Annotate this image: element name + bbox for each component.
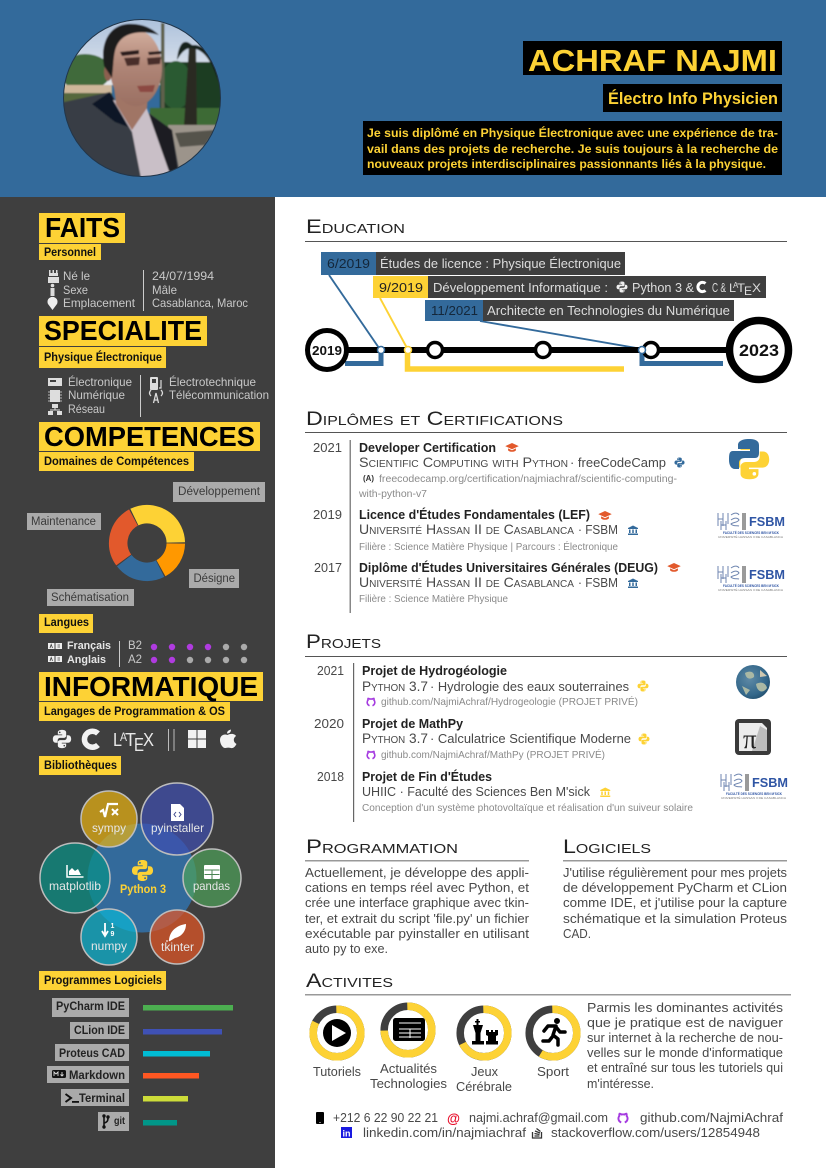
specialities list: Électrotechnique	[169, 374, 256, 389]
row: Markdown	[47, 1066, 199, 1083]
entry: Licence: 2019	[313, 507, 342, 522]
personal facts	[48, 269, 248, 311]
icon: linkedin: in	[342, 1128, 350, 1138]
text block: logiciels: J'utilise régulièrement pour mes projets	[563, 865, 787, 880]
icon: LaTeX: X	[143, 730, 154, 750]
entry: Developer Certification: Scientific Computing with Python	[359, 454, 568, 470]
text block: logiciels: schématique et la simulation Proteus	[563, 911, 788, 926]
row: Proteus: Proteus CAD	[59, 1048, 125, 1060]
text block: logiciels: CAD.	[563, 926, 591, 941]
timeline	[308, 252, 788, 380]
bar chart: software	[47, 998, 233, 1131]
icon: birthday cake	[48, 270, 59, 283]
milestone: 2023	[730, 320, 788, 380]
tag: Physique Electronique: Physique Électronique	[44, 351, 162, 364]
row: git: git	[114, 1115, 125, 1127]
facts labels: Né le	[63, 269, 90, 283]
contact details	[316, 1110, 783, 1140]
specialities list: Électronique	[68, 374, 132, 389]
name: ACHRAF NAJMI	[528, 43, 777, 78]
milestone: 2023: 2023	[739, 341, 779, 360]
tag: Bibliotheques	[39, 756, 121, 775]
bubble: sympy: sympy	[92, 821, 126, 835]
projects list	[314, 663, 788, 822]
row: Terminal	[61, 1089, 188, 1106]
summary: vail dans des projets de recherche. Je suis toujours à la recherche de	[367, 142, 778, 156]
job title	[603, 84, 782, 112]
text block: activites: velles sur le monde d'informatique	[587, 1045, 783, 1060]
milestone: 2019: 2019	[312, 343, 342, 358]
event: 6/2019	[321, 252, 625, 275]
icon: phone	[316, 1112, 324, 1124]
text block: programmation: crée une interface graphique avec tkin-	[305, 895, 529, 910]
specialities list: Numérique	[68, 388, 125, 402]
heading: COMPETENCES: COMPETENCES	[44, 421, 255, 452]
event: 11/2021: Architecte en Technologies du Numérique	[487, 304, 730, 318]
connector lines	[329, 275, 642, 349]
languages: B2	[128, 638, 142, 652]
entry: Developer Certification: with-python-v7	[358, 488, 427, 500]
contact details: linkedin.com/in/najmiachraf	[363, 1125, 526, 1140]
label: Schematisation	[47, 589, 134, 606]
text block: programmation: ter, et extrait du script 'file.py' un fichier	[305, 911, 530, 926]
diplomas list	[313, 439, 785, 613]
heading: SPECIALITE: SPECIALITE	[44, 315, 202, 346]
languages: Français	[67, 640, 111, 652]
specialities list: Télécommunication	[169, 388, 269, 402]
bubble diagram: python libraries	[40, 783, 241, 965]
facts labels: Emplacement	[63, 296, 136, 310]
bubble: sympy	[81, 791, 137, 847]
icon: LaTeX	[113, 730, 154, 755]
facts values: 24/07/1994	[152, 269, 214, 283]
icon: LaTeX: T	[125, 730, 136, 750]
text block: activites: m'intéresse.	[587, 1076, 654, 1091]
event: 11/2021	[425, 300, 734, 321]
label: Designe: Désigne	[194, 573, 235, 585]
entry: Licence	[313, 507, 638, 553]
level dots: English	[151, 657, 247, 663]
central bubble: Python 3	[88, 824, 196, 932]
entry: Projet de Fin d'Etudes: Conception d'un système photovoltaïque et réalisation d'un suiveur solaire	[362, 802, 693, 814]
label: Maintenance	[27, 513, 101, 530]
facts labels	[63, 269, 136, 310]
logo: FSBM	[718, 513, 785, 539]
row: git	[98, 1112, 177, 1131]
icon: stack overflow	[532, 1128, 542, 1138]
entry: Licence: · FSBM	[578, 522, 618, 537]
event: 9/2019: T	[737, 281, 746, 295]
tag: Langues: Langues	[44, 617, 89, 629]
header band	[0, 0, 826, 197]
language and OS icons	[53, 729, 237, 755]
icon: github	[618, 1114, 628, 1122]
contact details: stackoverflow.com/users/12854948	[551, 1125, 760, 1140]
entry: DEUG: Université Hassan II de Casablanca	[359, 574, 574, 590]
row: Markdown: Markdown	[69, 1070, 125, 1082]
row: CLion	[70, 1022, 222, 1039]
entry: DEUG: · FSBM	[578, 575, 618, 590]
bubble: numpy: 9	[110, 931, 114, 938]
bubble: tkinter	[150, 910, 204, 964]
tag: Programmes Logiciels: Programmes Logiciels	[44, 975, 162, 987]
entry: Developer Certification: 2021	[313, 440, 342, 455]
logo: python	[729, 439, 769, 479]
entry: Developer Certification: · freeCodeCamp	[570, 455, 666, 470]
entry: Projet de Fin d'Etudes: 2018	[317, 769, 344, 784]
milestone: 2019	[308, 330, 346, 370]
text block: activites: que je pratique est de naviguer	[587, 1015, 784, 1030]
entry: MathPy: 2020	[314, 716, 344, 731]
logo: FSBM	[718, 566, 785, 592]
specialities list	[48, 374, 269, 417]
bubble: tkinter: tkinter	[161, 940, 194, 954]
icon: person	[50, 284, 54, 296]
facts labels: Sexe	[63, 283, 88, 297]
event: 11/2021: 11/2021	[431, 304, 478, 318]
activity: Jeux Cerebrale: Cérébrale	[456, 1079, 512, 1094]
icon: network	[48, 404, 62, 415]
entry: Projet de Fin d'Etudes	[317, 769, 693, 814]
activity: Actualites Technologies: Actualités	[380, 1061, 437, 1076]
label: Schematisation: Schématisation	[51, 592, 129, 604]
icon: chip	[48, 390, 62, 402]
entry: MathPy: Projet de MathPy	[362, 717, 463, 731]
event: 9/2019: 9/2019	[379, 281, 423, 295]
text block: activites: Parmis les dominantes activités	[587, 1000, 784, 1015]
summary: Je suis diplômé en Physique Électronique avec une expérience de tra-	[367, 125, 778, 140]
icon: at sign: @	[447, 1110, 460, 1126]
icon: pi calculator: π	[743, 724, 757, 754]
facts values: Casablanca, Maroc	[152, 296, 248, 310]
activity: Sport: Sport	[537, 1064, 569, 1079]
icon: antenna	[150, 390, 162, 403]
bubble: pyinstaller: pyinstaller	[151, 821, 204, 835]
tag: Physique Electronique	[39, 347, 166, 368]
text block: programmation: exécutable par pyinstaller en utilisant	[305, 926, 529, 941]
tag: Langues	[39, 614, 93, 633]
entry: Projet de Fin d'Etudes: UHIIC · Faculté des Sciences Ben M'sick	[362, 784, 590, 799]
icon: charging station	[150, 377, 161, 390]
icon: translate	[48, 643, 62, 662]
contact details: github.com/NajmiAchraf	[640, 1110, 783, 1125]
entry: MathPy	[314, 716, 650, 761]
text block: activites	[587, 1000, 784, 1091]
text block: programmation: cations en temps réel avec Python, et	[305, 880, 529, 895]
text block: logiciels: comme IDE, et j'utilise pour la capture	[563, 895, 787, 910]
entry: Licence: Licence d'Études Fondamentales (LEF)	[359, 507, 590, 522]
entry: MathPy: · Calculatrice Scientifique Moderne	[430, 731, 631, 746]
event: 9/2019: C &	[712, 281, 726, 295]
event: 9/2019: E	[744, 284, 752, 298]
row: PyCharm: PyCharm IDE	[56, 1001, 125, 1013]
contact details: najmi.achraf@gmail.com	[469, 1110, 608, 1125]
bubble: matplotlib	[40, 843, 110, 913]
heading: INFORMATIQUE: INFORMATIQUE	[44, 671, 258, 702]
label: Developpement	[173, 482, 265, 502]
text block: programmation: Actuellement, je développe des appli-	[305, 865, 529, 880]
row: Proteus	[55, 1044, 210, 1061]
icon: pi calculator	[735, 719, 771, 755]
bubble: pyinstaller	[141, 783, 213, 855]
tag: Langages: Langages de Programmation & OS	[44, 706, 225, 718]
activity: Tutoriels	[313, 1009, 361, 1079]
event: 6/2019: 6/2019	[327, 257, 370, 271]
level dots: French	[151, 644, 247, 650]
summary	[363, 121, 782, 175]
portrait photo	[64, 20, 220, 176]
entry: Projet de Fin d'Etudes: Projet de Fin d'Études	[362, 769, 492, 784]
entry: Hydrogeologie: 2021	[317, 663, 344, 678]
tag: Langages	[39, 702, 230, 721]
central bubble: Python 3: Python 3	[120, 882, 166, 896]
tag: Personnel: Personnel	[44, 247, 96, 259]
activity: Actualites Technologies	[370, 1006, 448, 1091]
entry: Hydrogeologie: github.com/NajmiAchraf/Hydrogeologie (PROJET PRIVÉ)	[381, 695, 638, 708]
icon: windows	[188, 730, 206, 748]
event: 9/2019: X	[752, 281, 761, 295]
event: 9/2019: L	[729, 281, 736, 295]
contact details: +212 6 22 90 22 21	[333, 1110, 438, 1125]
entry: Developer Certification	[313, 440, 685, 500]
entry: DEUG	[314, 560, 681, 605]
event: 9/2019: Développement Informatique :	[433, 281, 608, 295]
tag: Programmes Logiciels	[39, 971, 166, 990]
bubble: matplotlib: matplotlib	[49, 879, 101, 893]
activity: Actualites Technologies: Technologies	[370, 1076, 448, 1091]
event: 9/2019	[373, 276, 766, 298]
section heading: Logiciels: Logiciels	[563, 837, 651, 858]
heading: FAITS: FAITS	[45, 212, 120, 243]
label: Designe	[189, 569, 239, 588]
row: CLion: CLion IDE	[74, 1025, 125, 1037]
bubble: numpy: numpy	[91, 939, 127, 953]
donut chart: skills	[107, 503, 187, 583]
specialities list: Réseau	[68, 402, 105, 416]
job title: Électro Info Physicien	[608, 89, 778, 108]
text block: activites: et entraîné sur tous les tutoriels qui	[587, 1060, 783, 1075]
entry: MathPy: github.com/NajmiAchraf/MathPy (PROJET PRIVÉ)	[381, 748, 605, 761]
icon: LaTeX: L	[113, 730, 122, 750]
tag: Personnel	[39, 244, 101, 260]
icon: chess pieces	[472, 1019, 498, 1044]
logo: FSBM	[721, 774, 788, 800]
entry: DEUG: 2017	[314, 560, 342, 575]
text block: logiciels: de développement PyCharm et CLion	[563, 880, 787, 895]
section heading: Programmation: Programmation	[306, 837, 458, 858]
text block: logiciels	[563, 865, 788, 941]
tag: Domaines de Competences	[39, 452, 194, 471]
icon: location pin	[48, 297, 58, 310]
entry: Developer Certification: freecodecamp.org/certification/najmiachraf/scientific-computing-	[379, 473, 677, 485]
entry: Licence: Filière : Science Matière Physique | Parcours : Électronique	[359, 540, 618, 553]
tag: Bibliotheques: Bibliothèques	[44, 760, 117, 772]
bubble: pandas	[183, 849, 241, 907]
icon: LaTeX: E	[134, 735, 144, 755]
section heading: Activites: Activites	[306, 971, 393, 992]
activity: Jeux Cerebrale	[456, 1009, 512, 1094]
section heading: Education: Education	[306, 217, 405, 238]
label: Maintenance: Maintenance	[31, 516, 96, 528]
image: earth	[736, 665, 770, 699]
tag: Domaines de Competences: Domaines de Compétences	[44, 456, 189, 468]
summary: nouveaux projets interdisciplinaires passionnants liés à la physique.	[367, 157, 766, 171]
row: PyCharm	[52, 998, 233, 1017]
text block: activites: sur internet à la recherche de nou-	[587, 1030, 783, 1045]
event: 9/2019: A	[733, 281, 739, 290]
entry: Developer Certification: Developer Certification	[359, 441, 496, 455]
icon: LaTeX: A	[120, 730, 127, 744]
icon: C	[84, 731, 98, 747]
text block: programmation	[305, 865, 530, 956]
activity: Jeux Cerebrale: Jeux	[471, 1064, 498, 1079]
icon: python	[53, 730, 71, 748]
entry: Hydrogeologie	[317, 663, 648, 708]
entry: DEUG: Diplôme d'Études Universitaires Générales (DEUG)	[359, 560, 658, 575]
sidebar panel	[0, 197, 275, 1168]
entry: Hydrogeologie: · Hydrologie des eaux souterraines	[430, 679, 629, 694]
section heading: Diplomes et Certifications: Diplômes et Certifications	[306, 409, 563, 430]
languages: A2	[128, 652, 142, 666]
timeline nodes	[378, 342, 658, 358]
icon: apple	[220, 730, 236, 748]
languages: Anglais	[67, 654, 106, 666]
activity: Tutoriels: Tutoriels	[313, 1064, 361, 1079]
row: Terminal: Terminal	[79, 1093, 125, 1105]
event: 9/2019: Python 3 &	[632, 281, 695, 295]
bubble: numpy: 1	[110, 923, 114, 930]
text block: programmation: auto py to exe.	[305, 941, 388, 956]
icon: runner	[543, 1018, 565, 1045]
entry: Licence: Université Hassan II de Casablanca	[359, 521, 574, 537]
entry: MathPy: Python 3.7	[362, 730, 428, 746]
section heading: Projets: Projets	[306, 632, 381, 653]
activity: Sport	[529, 1009, 577, 1079]
entry: Developer Certification: (A)	[363, 474, 374, 483]
label: Developpement: Développement	[178, 486, 261, 498]
facts values	[152, 269, 248, 310]
bubble: pandas: pandas	[193, 879, 230, 893]
entry: Hydrogeologie: Python 3.7	[362, 678, 428, 694]
icon: linkedin	[341, 1127, 352, 1138]
languages	[48, 638, 247, 667]
bubble: numpy	[81, 909, 137, 965]
period bars	[345, 350, 723, 369]
facts values: Mâle	[152, 283, 177, 297]
icon: electronics board	[48, 378, 62, 386]
event: 6/2019: Études de licence : Physique Électronique	[380, 256, 621, 271]
entry: DEUG: Filière : Science Matière Physique	[359, 593, 508, 605]
entry: Hydrogeologie: Projet de Hydrogéologie	[362, 664, 507, 678]
